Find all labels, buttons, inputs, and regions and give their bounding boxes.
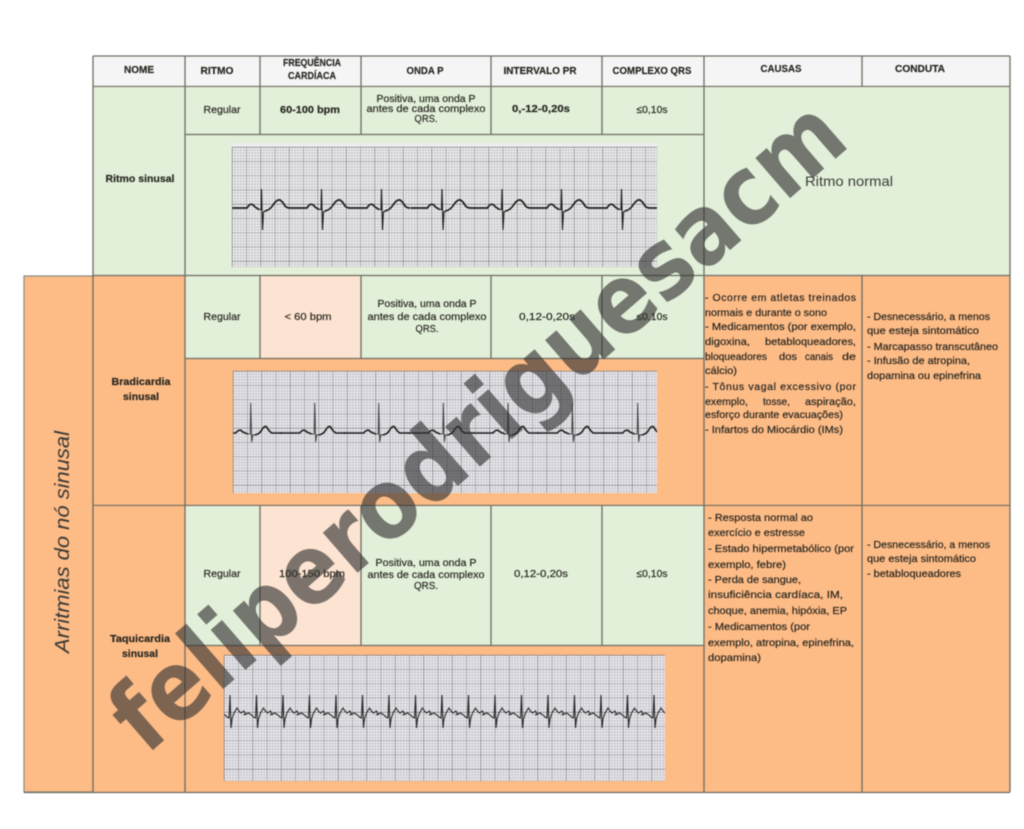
text block: causas taquicardia: exemplo, atropina, epinefrina, xyxy=(708,637,854,649)
text block: causas bradicardia xyxy=(705,292,856,436)
text block: conduta bradicardia: - Marcapasso transcutâneo xyxy=(867,341,998,353)
cells: taquicardia values: QRS. xyxy=(414,580,438,592)
header row: CARDÍACA xyxy=(288,69,336,82)
ECG strip: ritmo sinusal xyxy=(230,143,657,267)
panel: taquicardia sinusal row xyxy=(24,505,1010,792)
text block: causas bradicardia: - Tônus vagal excessivo (por xyxy=(705,381,856,393)
row name: taquicardia sinusal: sinusal xyxy=(122,648,158,660)
cells: taquicardia values: antes de cada complexo xyxy=(368,569,485,581)
text block: causas bradicardia: normais e durante o sono xyxy=(705,307,827,319)
text block: conduta bradicardia: - Desnecessário, a menos xyxy=(867,311,990,323)
text block: conduta taquicardia: - betabloqueadores xyxy=(867,568,961,580)
cells: ritmo sinusal values: 60-100 bpm xyxy=(280,104,340,116)
text block: causas bradicardia: betabloqueadores, xyxy=(765,336,856,348)
row name: bradicardia sinusal: sinusal xyxy=(123,391,159,403)
text block: conduta bradicardia: - Infusão de atropina, xyxy=(867,355,970,367)
row name: ritmo sinusal: Ritmo sinusal xyxy=(106,173,175,185)
cells: taquicardia values: Positiva, uma onda P xyxy=(376,557,476,569)
cells: ritmo sinusal values: Positiva, uma onda P xyxy=(376,93,476,105)
text block: causas bradicardia: - Medicamentos (por exemplo, xyxy=(705,321,856,333)
text block: causas taquicardia: dopamina) xyxy=(708,652,761,664)
row name: bradicardia sinusal: Bradicardia xyxy=(112,376,171,388)
text block: causas taquicardia: - Perda de sangue, xyxy=(708,574,801,586)
header row: FREQUÊNCIA xyxy=(283,56,341,69)
text block: causas bradicardia: - Ocorre em atletas treinados xyxy=(705,292,856,304)
text block: conduta taquicardia xyxy=(867,539,990,580)
cells: taquicardia values xyxy=(204,557,668,592)
header row: NOME xyxy=(124,65,154,76)
text block: conduta taquicardia: que esteja sintomático xyxy=(867,553,976,565)
cells: ritmo sinusal values: QRS. xyxy=(414,113,438,125)
text block: causas taquicardia xyxy=(708,512,855,664)
text block: causas bradicardia: digoxina, xyxy=(705,336,750,348)
cells: bradicardia values xyxy=(204,298,668,335)
cells: ritmo sinusal values: 0,-12-0,20s xyxy=(512,103,570,115)
text block: causas taquicardia: exemplo, febre) xyxy=(708,559,786,571)
panel: ritmo sinusal row xyxy=(93,87,1010,275)
cells: ritmo sinusal values: Regular xyxy=(204,104,241,116)
text block: causas bradicardia: aspiração, xyxy=(805,396,856,408)
header row: COMPLEXO QRS xyxy=(612,66,692,77)
text block: causas bradicardia: de xyxy=(842,351,856,363)
header row: INTERVALO PR xyxy=(504,66,577,77)
text block: causas bradicardia: bloqueadores xyxy=(705,351,767,363)
text block: causas taquicardia: choque, anemia, hipóxia, EP xyxy=(708,605,847,617)
cells: bradicardia values: < 60 bpm xyxy=(284,311,332,323)
text block: causas bradicardia: exemplo, xyxy=(705,396,748,408)
ECG strip: bradicardia xyxy=(216,371,669,493)
cells: bradicardia values: antes de cada complexo xyxy=(368,311,487,323)
text block: causas taquicardia: - Estado hipermetabólico (por xyxy=(708,543,855,555)
text block: conduta taquicardia: - Desnecessário, a menos xyxy=(867,539,990,551)
text: ritmo normal: Ritmo normal xyxy=(805,173,893,189)
text block: causas taquicardia: insuficiência cardíaca, IM, xyxy=(708,589,843,601)
header row: CONDUTA xyxy=(895,64,945,75)
row name: bradicardia sinusal xyxy=(112,376,171,403)
cells: bradicardia values: 0,12-0,20s xyxy=(519,311,575,323)
text block: causas bradicardia: canais xyxy=(805,351,833,363)
cells: taquicardia values: ≤0,10s xyxy=(636,568,668,580)
panel: side label Arritmias do nó sinusal xyxy=(24,276,93,792)
text block: causas bradicardia: - Infartos do Miocárdio (IMs) xyxy=(705,424,843,436)
cells: bradicardia values: ≤0,10s xyxy=(636,311,668,323)
text block: causas bradicardia: esforço durante evacuações) xyxy=(705,409,843,421)
cells: bradicardia values: Regular xyxy=(204,311,241,323)
row name: taquicardia sinusal: Taquicardia xyxy=(110,633,170,645)
text block: conduta bradicardia xyxy=(867,311,998,382)
text block: causas taquicardia: - Medicamentos (por xyxy=(708,621,811,633)
panel: bradicardia sinusal row xyxy=(93,275,1010,506)
cells: ritmo sinusal values: antes de cada complexo xyxy=(366,103,486,115)
text block: causas bradicardia: dos xyxy=(779,351,797,363)
text block: causas taquicardia: - Resposta normal ao xyxy=(708,512,813,524)
text block: causas bradicardia: tosse, xyxy=(763,396,790,408)
text block: conduta bradicardia: dopamina ou epinefrina xyxy=(867,370,981,382)
ECG strip: taquicardia xyxy=(217,655,670,781)
cells: taquicardia values: 0,12-0,20s xyxy=(514,568,568,580)
cells: ritmo sinusal values xyxy=(204,93,668,125)
header row xyxy=(93,56,1010,87)
cells: taquicardia values: 100-150 bpm xyxy=(279,568,345,580)
cells: bradicardia values: QRS. xyxy=(416,323,438,335)
header row: RITMO xyxy=(200,66,234,77)
header row: ONDA P xyxy=(406,66,444,77)
cells: ritmo sinusal values: ≤0,10s xyxy=(636,104,668,116)
watermark: feliperodriguesacm xyxy=(87,76,867,773)
side label text: Arritmias do nó sinusal xyxy=(52,430,74,654)
cells: bradicardia values: Positiva, uma onda P xyxy=(378,298,476,310)
cells: taquicardia values: Regular xyxy=(204,568,241,580)
header row: CAUSAS xyxy=(760,64,802,75)
row name: taquicardia sinusal xyxy=(110,633,170,660)
text block: causas bradicardia: cálcio) xyxy=(705,365,737,377)
text block: conduta bradicardia: que esteja sintomático xyxy=(867,325,979,337)
text block: causas taquicardia: exercício e estresse xyxy=(708,527,805,539)
